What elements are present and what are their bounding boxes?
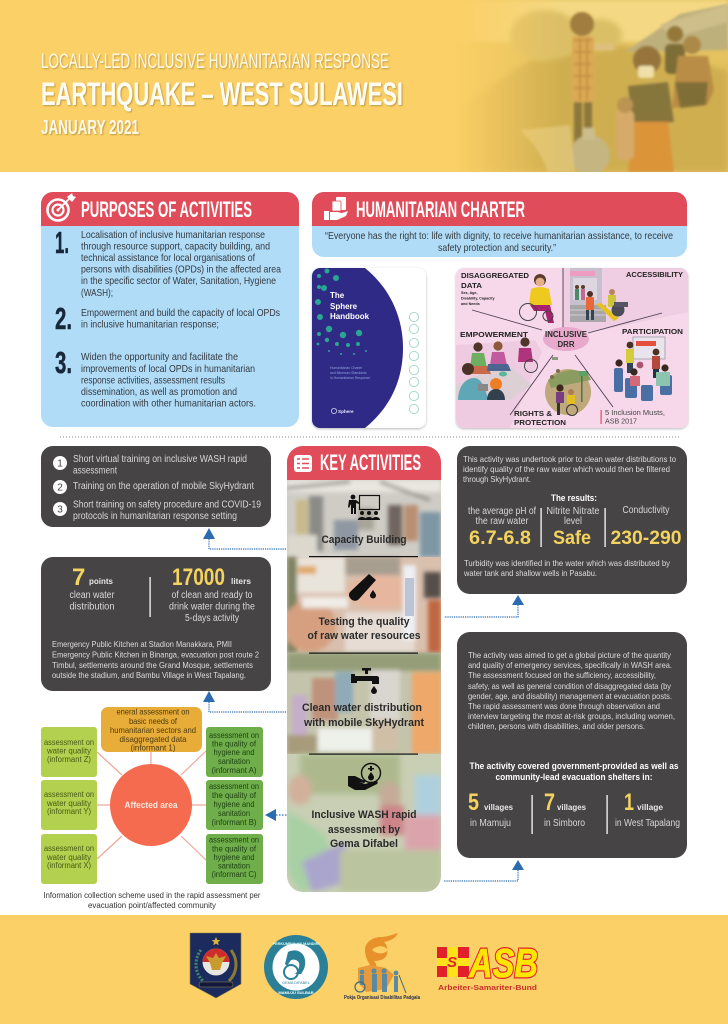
box: general assessment: (informant 1) — [130, 744, 176, 752]
stat: 7 points: clean water — [70, 590, 115, 601]
assessment description: and quality of emergency services, specifically in WASH area. — [468, 660, 672, 670]
activity: inclusive WASH rapid assessment: Gema Difabel — [330, 838, 398, 850]
testing intro text: This activity was undertook prior to clean water distributions to — [463, 454, 676, 464]
stat: 7 points — [70, 564, 115, 612]
inclusive DRR centre: INCLUSIVE — [545, 330, 588, 339]
box: informant B: assessment on — [209, 782, 259, 791]
arrow: to water stats — [203, 691, 286, 712]
icon: hand with drop — [348, 764, 380, 790]
arrow: to scheme — [265, 809, 287, 821]
result: pH — [468, 506, 536, 549]
turbidity note — [463, 558, 671, 578]
photo: rapid assessment — [287, 754, 441, 892]
purpose 1: through resource support, capacity building, and — [81, 242, 270, 252]
box: informant C: sanitation — [218, 862, 250, 870]
heading: key activities: KEY ACTIVITIES — [320, 450, 421, 475]
assessment description: interview targeting the most at-risk groups, including women, — [468, 711, 675, 721]
icon: trainer with board — [348, 495, 380, 520]
charter quote: “Everyone has the right to: life with dignity, to receive humanitarian assistance, to receive — [325, 231, 673, 242]
stat: Mamuju: in Mamuju — [470, 818, 511, 829]
handbook icons — [409, 312, 419, 414]
training item 2: 2 — [57, 482, 63, 494]
label: participation: PARTICIPATION — [622, 327, 683, 336]
assessment description: The rapid assessment was done through observation and — [468, 701, 660, 711]
training item 3: Short training on safety procedure and COVID-19 — [73, 500, 261, 510]
purpose 1: Localisation of inclusive humanitarian response — [81, 230, 265, 241]
activity: clean water distribution — [302, 668, 424, 755]
box: informant B: the quality of — [212, 791, 257, 800]
handbook title: The — [330, 291, 345, 300]
stat: Mamuju — [468, 789, 513, 829]
header title lines: LOCALLY-LED INCLUSIVE HUMANITARIAN RESPONSE — [41, 50, 389, 73]
connector lines — [472, 268, 662, 415]
stat: 17000 liters: drink water during the — [169, 602, 255, 612]
inclusive DRR centre: DRR — [558, 340, 575, 349]
handbook title: Sphere — [330, 302, 358, 311]
results heading: The results: — [551, 493, 597, 503]
coverage statement: The activity covered government-provided as well as — [470, 761, 678, 771]
header title lines: JANUARY 2021 — [41, 117, 139, 139]
label: rights and protection: RIGHTS & — [514, 409, 553, 418]
logo: ASB: Arbeiter-Samariter-Bund — [438, 983, 537, 992]
label: disaggregated data: Disability, Capacity — [461, 296, 495, 300]
assessment description: The activity was aimed to get a global picture of the quantity — [468, 650, 672, 660]
scheme caption — [44, 891, 261, 910]
activity: capacity building — [309, 495, 418, 557]
empowerment illustration — [456, 337, 538, 400]
arrow: to rapid assessment — [444, 860, 524, 881]
inclusive DRR diagram — [456, 268, 688, 428]
result: nitrite nitrate: level — [564, 516, 582, 527]
box: informant C: assessment on — [209, 836, 259, 844]
stat: 17000 liters — [169, 564, 255, 624]
label: disaggregated data: DISAGGREGATED — [461, 271, 530, 280]
photo: clean water — [287, 653, 441, 754]
logo: Gema Difabel: GEMA DIFABEL — [282, 981, 310, 985]
logo: ASB: ASB — [468, 940, 538, 986]
purpose 1: 1. — [55, 225, 69, 260]
panel: key activities — [284, 446, 441, 892]
purpose 1 — [55, 225, 281, 299]
charter quote: safety protection and security.” — [438, 243, 557, 254]
box: informant B: hygiene and — [214, 800, 254, 809]
rights and protection illustration — [545, 357, 591, 416]
heading: charter: HUMANITARIAN CHARTER — [356, 197, 525, 222]
box: general assessment: basic needs of — [129, 717, 178, 726]
stat: West Tapalang: in West Tapalang — [615, 818, 680, 829]
activity: testing raw water: of raw water resources — [308, 630, 420, 642]
distribution locations text: Emergency Public Kitchen in Binanga, evacuation post route 2 — [52, 650, 259, 660]
footer with logos — [0, 915, 728, 1024]
training item 1: assessment — [73, 466, 117, 476]
result: conductivity — [610, 505, 682, 549]
training item 1 — [53, 454, 247, 476]
handbook title: Handbook — [330, 312, 370, 321]
icon: test tube — [349, 574, 376, 601]
box: informant C: the quality of — [212, 844, 257, 854]
logo: ministry shield — [190, 933, 241, 998]
label: empowerment: EMPOWERMENT — [460, 330, 528, 339]
result: nitrite nitrate: Nitrite Nitrate — [546, 506, 600, 517]
stat: Mamuju: 5 — [468, 789, 479, 816]
panel: training list — [41, 446, 271, 527]
distribution locations text: Emergency Public Kitchen at Stadion Manakkara, PMII — [52, 639, 232, 649]
stat: 17000 liters: 17000 — [172, 564, 225, 591]
logo: ASB — [437, 940, 538, 992]
icon: checklist — [294, 455, 312, 472]
box: informant C: (informant C) — [212, 870, 257, 879]
training item 2: Training on the operation of mobile SkyHydrant — [73, 481, 254, 492]
distribution locations text: outside the stadium, and Bambu Village in West Tapalang. — [52, 670, 246, 680]
header photo: children at a water point — [474, 0, 728, 172]
box: general assessment: humanitarian sectors and — [110, 726, 196, 735]
photo: capacity building — [287, 480, 441, 557]
purpose 3: dissemination, as well as promotion and — [81, 387, 237, 398]
panel: clean water distribution stats — [41, 557, 271, 691]
purpose 2: in inclusive humanitarian response; — [81, 320, 219, 330]
box: general assessment: eneral assessment on — [116, 708, 190, 716]
header title lines: EARTHQUAKE – WEST SULAWESI — [41, 76, 403, 112]
box: informant Z — [41, 727, 97, 777]
assessment description: The assessment focused on the sufficiency, accessibility, — [468, 670, 656, 680]
result: pH: the raw water — [476, 516, 529, 527]
box: informant Z: water quality — [46, 746, 91, 756]
accessibility illustration — [570, 268, 628, 322]
box: informant Y: (informant Y) — [47, 807, 91, 816]
handbook subtitle: and Minimum Standards — [330, 371, 367, 375]
scheme caption: Information collection scheme used in the rapid assessment per — [44, 891, 261, 900]
label: disaggregated data: and Needs — [461, 302, 480, 306]
purpose 1: persons with disabilities (OPDs) in the affected area — [81, 264, 281, 276]
stat: 17000 liters: 5-days activity — [185, 613, 239, 624]
result: conductivity: Conductivity — [622, 505, 670, 516]
stat: 17000 liters: liters — [231, 576, 251, 586]
box: informant X: assessment on — [44, 844, 94, 853]
box: informant X: (informant X) — [47, 861, 91, 870]
source note — [600, 408, 665, 426]
purpose 2 — [55, 301, 280, 336]
stat: 17000 liters: of clean and ready to — [172, 590, 253, 601]
header title lines — [41, 50, 403, 139]
stat: 7 points: 7 — [72, 564, 85, 591]
purpose 3: improvements of local OPDs in humanitarian — [81, 364, 255, 375]
purpose 1: (WASH); — [81, 288, 113, 299]
logo: Pokja Organisasi Disabilitas: Pokja Organisasi Disabilitas Padgala — [344, 995, 420, 1001]
activity: inclusive WASH rapid assessment — [312, 764, 416, 850]
participation illustration — [614, 337, 672, 401]
result: pH: 6.7-6.8 — [469, 528, 531, 549]
turbidity note: Turbidity was identified in the water which was distributed by — [464, 558, 671, 568]
stat: West Tapalang: village — [637, 802, 663, 812]
box: informant X — [41, 834, 97, 884]
label: accessibility: ACCESSIBILITY — [626, 270, 683, 279]
box: general assessment — [101, 707, 202, 752]
logo: ASB: ASB — [468, 940, 538, 986]
icon: target — [48, 193, 76, 220]
sphere logo: Sphere — [338, 409, 354, 414]
activity: clean water distribution: Clean water distribution — [302, 702, 422, 714]
turbidity note: water tank and shallow wells in Pasabu. — [463, 568, 597, 578]
arrow: to testing results — [444, 595, 524, 617]
purpose 3: Widen the opportunity and facilitate the — [81, 352, 238, 363]
stat: Simboro: villages — [557, 802, 586, 812]
header banner — [0, 0, 728, 175]
activity: capacity building: Capacity Building — [322, 534, 406, 546]
assessment description: gender, age, and disability) management at evacuation posts. — [468, 691, 672, 701]
purpose 2: 2. — [55, 301, 72, 336]
assessment description — [468, 650, 675, 731]
panel: rapid assessment — [457, 632, 687, 858]
activity: clean water distribution: with mobile SkyHydrant — [303, 717, 424, 729]
sphere handbook cover — [312, 268, 426, 428]
result: pH: the average pH of — [468, 506, 536, 517]
panel: humanitarian charter — [312, 192, 687, 257]
testing intro text: through SkyHydrant. — [463, 474, 531, 484]
handbook subtitle — [330, 366, 370, 380]
box: informant A: sanitation — [218, 757, 250, 766]
label: disaggregated data — [461, 271, 530, 306]
logo: Gema Difabel: MAMUJU SULBAR — [278, 990, 314, 995]
sphere logo — [331, 408, 354, 414]
stat: Simboro: in Simboro — [544, 818, 585, 829]
inclusive DRR centre — [543, 327, 589, 351]
logo: Gema Difabel: PERKUMPULAN MANDIRI — [273, 942, 319, 946]
affected area circle — [110, 764, 192, 846]
purpose 2: Empowerment and build the capacity of local OPDs — [81, 308, 280, 319]
information collection scheme diagram — [41, 707, 263, 884]
label: rights and protection: PROTECTION — [514, 418, 566, 427]
result: nitrite nitrate — [546, 506, 600, 549]
stat: Simboro — [544, 789, 586, 829]
logo: Pokja Organisasi Disabilitas — [344, 933, 420, 1001]
assessment description: safety, as well as general condition of disaggregated data (by — [468, 681, 672, 691]
box: informant C: hygiene and — [214, 853, 254, 862]
affected area circle: Affected area — [124, 800, 178, 810]
panel: water testing results — [457, 446, 687, 594]
purpose 3: 3. — [55, 345, 72, 380]
charter quote — [325, 231, 673, 254]
arrow: to training list — [203, 528, 286, 549]
source note: 5 Inclusion Musts, — [605, 408, 665, 417]
box: general assessment: disaggregated data — [120, 735, 187, 744]
handbook subtitle: in Humanitarian Response — [330, 376, 370, 380]
box: informant Y — [41, 780, 97, 830]
box: informant A: the quality of — [212, 740, 257, 748]
handbook title — [330, 291, 370, 321]
distribution locations text: Timbul, settlements around the Grand Mosque, settlements — [52, 660, 253, 670]
purpose 3: response activities, assessment results — [81, 376, 225, 386]
testing intro text — [463, 454, 676, 484]
panel: purposes of activities — [41, 192, 299, 427]
label: disaggregated data: Sex, Age, — [461, 291, 477, 295]
label: rights and protection — [514, 409, 566, 427]
stat: West Tapalang: 1 — [624, 789, 634, 816]
purpose 3 — [55, 345, 256, 410]
box: informant A: (informant A) — [212, 766, 257, 775]
label: disaggregated data: DATA — [461, 281, 483, 290]
box: informant C — [206, 834, 263, 884]
training item 3: protocols in humanitarian response setting — [73, 511, 237, 522]
activity: inclusive WASH rapid assessment: Inclusive WASH rapid — [312, 809, 416, 821]
training item 2 — [53, 480, 254, 494]
result: conductivity: 230-290 — [610, 528, 682, 549]
testing intro text: identify quality of the raw water which would then be filtered — [463, 464, 670, 474]
distribution locations text — [52, 639, 259, 680]
stat: 7 points: points — [89, 576, 113, 586]
activity: inclusive WASH rapid assessment: assessment by — [328, 824, 401, 836]
logo: ASB: S — [447, 954, 457, 971]
box: informant X: water quality — [46, 853, 91, 862]
box: informant A — [206, 727, 263, 777]
icon: faucet — [351, 668, 379, 694]
training item 3: 3 — [57, 504, 63, 516]
scheme caption: evacuation point/affected community — [88, 901, 216, 910]
stat: 7 points: distribution — [70, 602, 114, 612]
disaggregated data illustration — [520, 274, 554, 323]
icon: hand holding document — [324, 197, 348, 220]
box: informant A: hygiene and — [214, 748, 254, 757]
box: informant Y: water quality — [46, 799, 91, 808]
coverage statement: community-lead evacuation shelters in: — [496, 772, 653, 782]
box: informant B: sanitation — [218, 809, 250, 818]
heading: purposes: PURPOSES OF ACTIVITIES — [81, 197, 252, 222]
handbook subtitle: Humanitarian Charter — [330, 366, 363, 370]
source note: ASB 2017 — [605, 416, 637, 426]
activity: testing raw water — [308, 574, 420, 654]
box: informant Z: (informant Z) — [47, 755, 91, 764]
box: informant Z: assessment on — [44, 738, 94, 747]
result: nitrite nitrate: Safe — [553, 528, 591, 549]
training item 3 — [53, 500, 261, 522]
box: informant Y: assessment on — [44, 790, 94, 799]
box: informant B: (informant B) — [212, 818, 257, 827]
box: informant B — [206, 780, 263, 830]
coverage statement — [470, 761, 678, 782]
purpose 3: coordination with other humanitarian actors. — [81, 398, 256, 410]
stat: Mamuju: villages — [484, 802, 513, 812]
box: informant A: assessment on — [209, 731, 259, 740]
stat: West Tapalang — [615, 789, 680, 829]
purpose 1: technical assistance for local organisations of — [81, 253, 255, 264]
stat: Simboro: 7 — [544, 789, 555, 816]
assessment description: children, persons with disabilities, and older persons. — [468, 721, 645, 731]
training item 1: Short virtual training on inclusive WASH rapid — [73, 454, 247, 465]
training item 1: 1 — [57, 458, 63, 470]
activity: testing raw water: Testing the quality — [318, 616, 410, 628]
purpose 1: in the specific sector of Water, Sanitation, Hygiene — [81, 276, 276, 287]
logo: Gema Difabel — [264, 935, 328, 999]
photo: testing water — [284, 557, 441, 653]
